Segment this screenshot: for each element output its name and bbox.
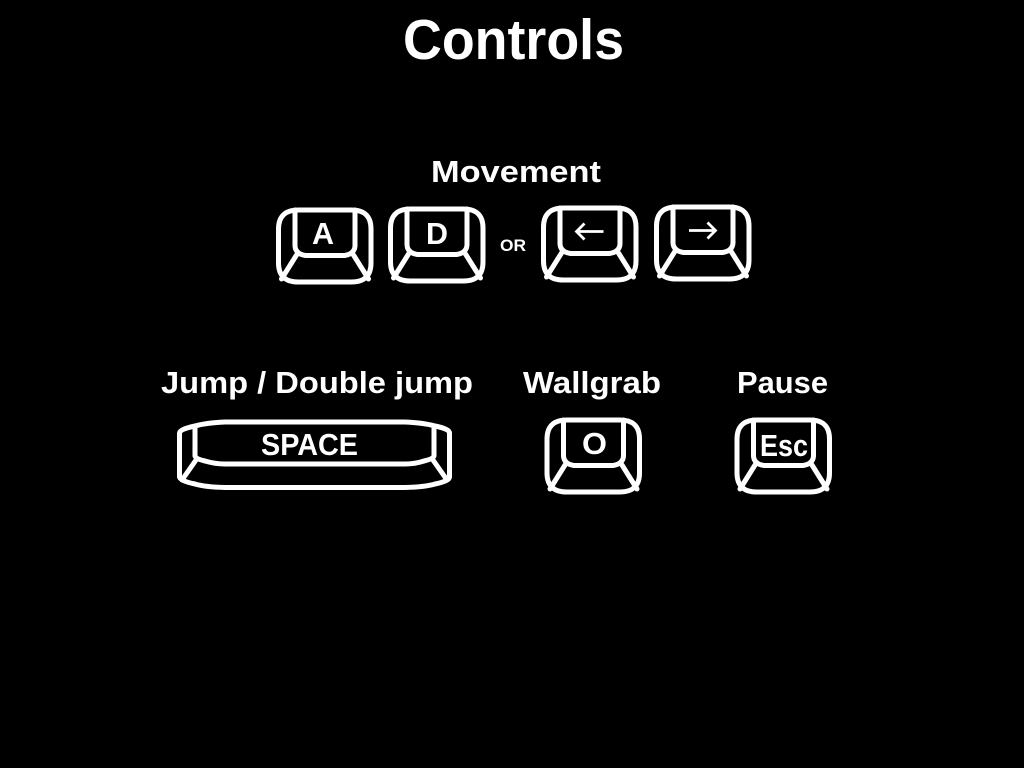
key: Esc: [737, 420, 830, 492]
key: D: [390, 209, 483, 281]
icon: left arrow: [576, 224, 604, 240]
heading: pause: Pause: [737, 365, 828, 400]
key: right arrow: [656, 207, 749, 279]
heading: movement: Movement: [431, 154, 601, 189]
key: space: [180, 422, 450, 488]
key: left arrow: [544, 208, 636, 280]
heading: jump: Jump / Double jump: [161, 365, 473, 400]
key: O: O: [582, 426, 607, 461]
key: space: SPACE: [261, 427, 358, 462]
key: O: [547, 420, 640, 492]
key: A: [278, 210, 371, 282]
key: D: D: [426, 216, 448, 251]
key: A: A: [312, 216, 334, 251]
title: Controls: [403, 8, 624, 72]
heading: wallgrab: Wallgrab: [523, 365, 661, 400]
icon: right arrow: [689, 222, 716, 238]
key: Esc: Esc: [760, 428, 808, 463]
text: or: OR: [500, 236, 526, 255]
